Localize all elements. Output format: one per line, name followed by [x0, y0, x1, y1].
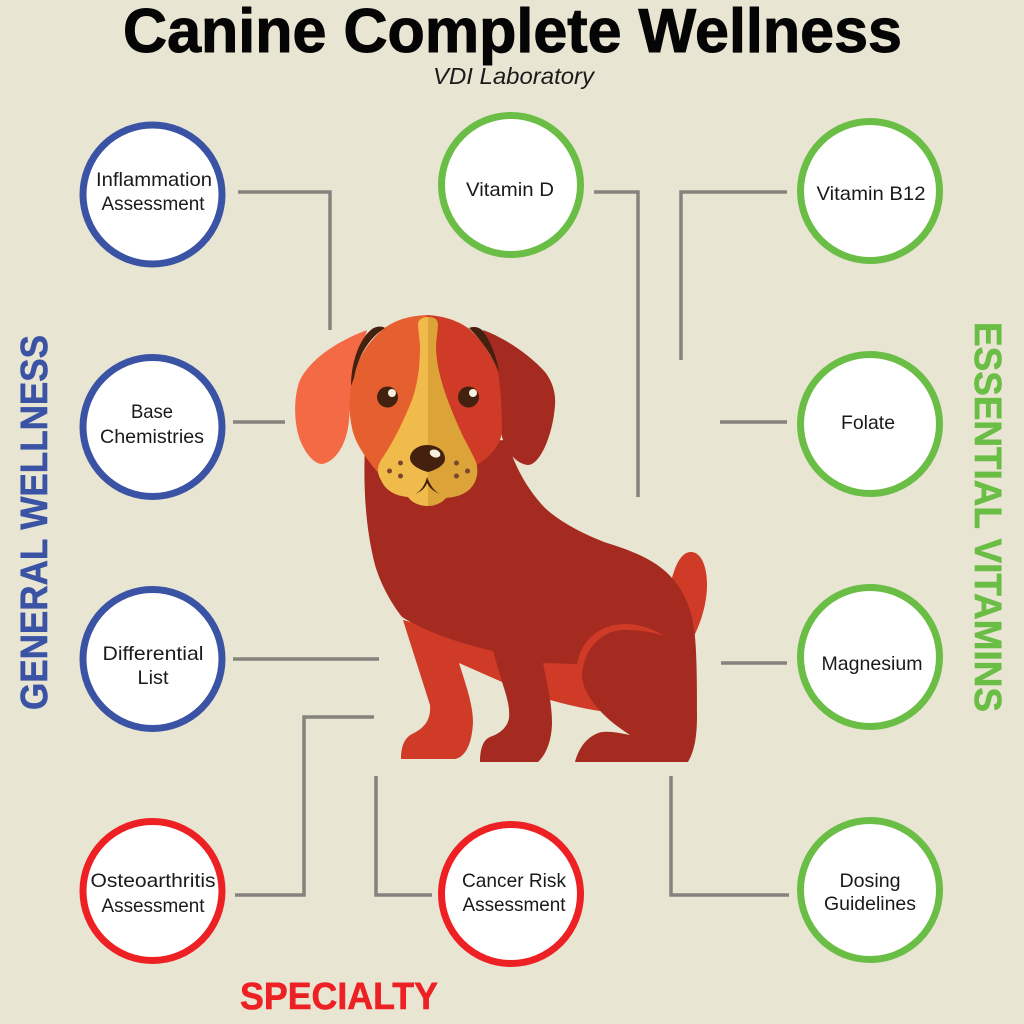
node: cancer risk assessment: Assessment: [462, 894, 566, 916]
connector: differential list: [233, 657, 379, 661]
node: vitamin D: Vitamin D: [466, 179, 554, 201]
node: differential list: Differential: [102, 643, 204, 665]
node: osteoarthritis assessment: Osteoarthritis: [90, 870, 216, 892]
node: base chemistries: [83, 358, 222, 496]
node: dosing guidelines: Dosing: [840, 870, 900, 892]
node: cancer risk assessment: [442, 824, 580, 964]
node: differential list: List: [138, 667, 169, 689]
dog tail: [672, 552, 707, 636]
dog right ear patch: [469, 327, 499, 372]
dog illustration: [295, 315, 707, 762]
node: folate: [800, 354, 940, 494]
dog body: [364, 440, 697, 762]
connector: magnesium: [721, 661, 787, 665]
connector: inflammation: [238, 192, 330, 330]
connector: base chemistries: [233, 420, 285, 424]
connector: vitamin B12: [681, 192, 787, 360]
node: vitamin D: [442, 116, 580, 254]
dog nose: [410, 445, 445, 472]
node: vitamin B12: [800, 122, 940, 260]
node: osteoarthritis assessment: [83, 822, 222, 960]
dog left ear patch: [351, 327, 385, 386]
dog left eye: [377, 386, 398, 408]
node: cancer risk assessment: Cancer Risk: [462, 870, 566, 892]
heading: specialty: SPECIALTY: [240, 976, 438, 1018]
connector: folate: [720, 420, 787, 424]
subtitle: VDI Laboratory: [433, 63, 596, 89]
node: inflammation assessment: Inflammation: [96, 169, 212, 191]
node: magnesium: Magnesium: [822, 653, 922, 675]
node: osteoarthritis assessment: Assessment: [102, 895, 205, 917]
node: magnesium: [800, 588, 940, 726]
node: vitamin B12: Vitamin B12: [816, 183, 926, 205]
node: inflammation assessment: [83, 125, 222, 264]
dog muzzle light side: [378, 317, 428, 506]
dog thigh arc: [577, 624, 664, 677]
heading: general wellness: GENERAL WELLNESS: [14, 335, 56, 710]
dog mouth: [415, 477, 440, 494]
node: base chemistries: Chemistries: [100, 426, 204, 448]
dog right eye: [458, 386, 479, 408]
connector: osteoarthritis: [235, 717, 374, 895]
dog right ear: [483, 330, 555, 465]
node: dosing guidelines: Guidelines: [824, 893, 916, 915]
dog muzzle dark side: [428, 317, 477, 506]
node: folate: Folate: [841, 412, 895, 434]
node: differential list: [83, 590, 222, 728]
heading: essential vitamins: ESSENTIAL VITAMINS: [966, 322, 1008, 712]
connector: vitamin D: [594, 192, 638, 497]
dog left ear: [295, 330, 367, 464]
connector: dosing guidelines: [671, 776, 789, 895]
dog whisker dots: [387, 460, 470, 478]
node: base chemistries: Base: [131, 401, 173, 423]
node: inflammation assessment: Assessment: [102, 193, 205, 215]
node: dosing guidelines: [800, 820, 940, 960]
dog head: [350, 315, 427, 495]
dog far legs and belly: [401, 617, 600, 759]
connector: cancer risk: [376, 776, 432, 895]
